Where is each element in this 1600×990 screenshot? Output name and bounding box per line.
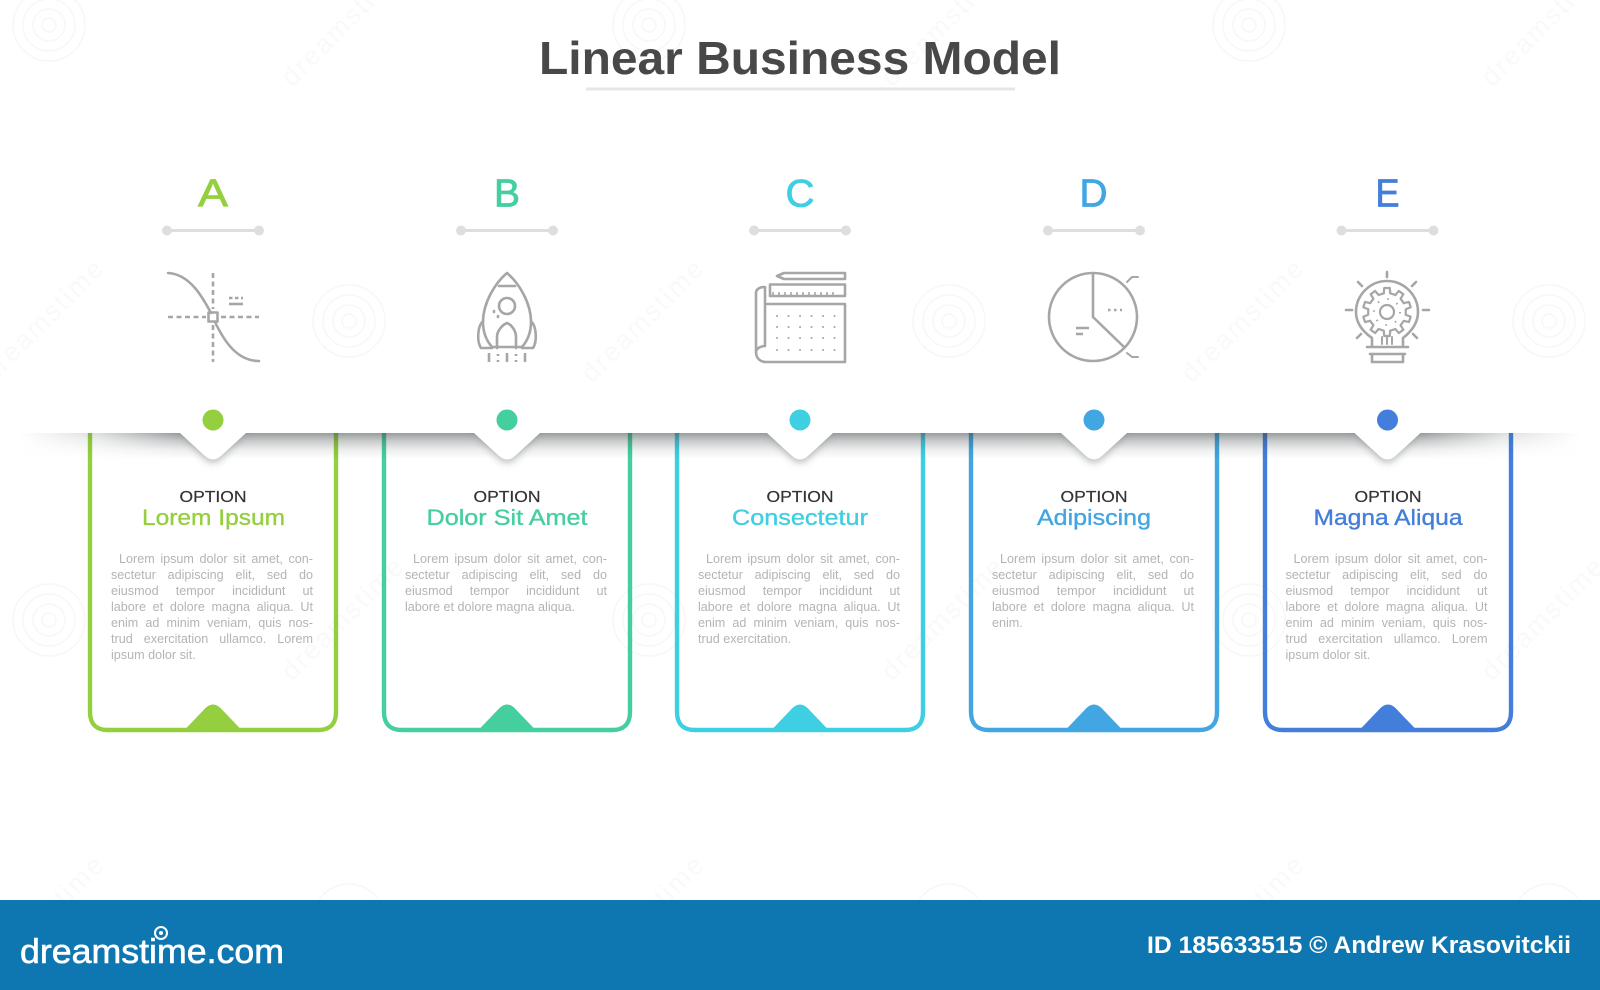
dot [790, 410, 810, 430]
dreamstime logo: dreamstime.com [20, 933, 284, 971]
option label: OPTION [1060, 489, 1128, 506]
option title: Dolor Sit Amet [426, 505, 588, 530]
letter B: B [494, 172, 520, 216]
body text: eiusmod tempor incididunt ut [698, 584, 900, 598]
body text [698, 552, 900, 646]
pointer [767, 433, 833, 460]
pointer [1061, 433, 1127, 460]
body text: enim ad minim veniam, quis nos- [1286, 616, 1488, 630]
watermark pattern: dreamstime [1175, 254, 1309, 388]
bottom notch [184, 704, 242, 731]
body text: labore et dolore magna aliqua. [405, 600, 575, 614]
column A header [162, 172, 264, 460]
option title: Lorem Ipsum [142, 505, 285, 530]
body text: ipsum dolor sit. [1286, 648, 1370, 662]
footer banner [0, 900, 1600, 990]
body text: labore et dolore magna aliqua. Ut [111, 600, 313, 614]
body text: enim ad minim veniam, quis nos- [111, 616, 313, 630]
body text: sectetur adipiscing elit, sed do [405, 568, 607, 582]
card outline [677, 433, 923, 730]
icon: rocket [478, 273, 536, 362]
dot [1377, 410, 1398, 430]
body text: labore et dolore magna aliqua. Ut [698, 600, 900, 614]
letter E: E [1376, 172, 1400, 216]
title underline [586, 88, 1015, 90]
connector line [162, 226, 264, 236]
body text [992, 552, 1194, 630]
option title: Adipiscing [1037, 505, 1151, 530]
watermark pattern: dreamstime [275, 552, 409, 686]
body text: Lorem ipsum dolor sit amet, con- [1294, 552, 1488, 566]
body text: trud exercitation. [698, 632, 791, 646]
timeline band shadow [38, 433, 1561, 466]
card outline [384, 433, 630, 730]
body text: eiusmod tempor incididunt ut [1286, 584, 1488, 598]
body text [1286, 552, 1488, 662]
pointer [474, 433, 540, 460]
image credit: ID 185633515 © Andrew Krasovitckii [1147, 932, 1571, 959]
body text: sectetur adipiscing elit, sed do [698, 568, 900, 582]
body text: sectetur adipiscing elit, sed do [111, 568, 313, 582]
watermark pattern: dreamstime [575, 254, 709, 388]
letter D: D [1080, 172, 1108, 216]
title: Linear Business Model [539, 32, 1061, 84]
column D header [1043, 172, 1145, 460]
body text: eiusmod tempor incididunt ut [111, 584, 313, 598]
body text: Lorem ipsum dolor sit amet, con- [413, 552, 607, 566]
panel: Dolor Sit Amet [382, 433, 632, 732]
body text: Lorem ipsum dolor sit amet, con- [119, 552, 313, 566]
panel: Adipiscing [968, 433, 1220, 732]
column C header [749, 172, 851, 460]
dot [1084, 410, 1104, 430]
body text: enim ad minim veniam, quis nos- [698, 616, 900, 630]
body text [111, 552, 313, 662]
letter C: C [786, 172, 814, 216]
dot [202, 410, 224, 430]
body text: trud exercitation ullamco. Lorem [1286, 632, 1488, 646]
option label: OPTION [180, 489, 246, 506]
watermark pattern: dreamstime [1175, 850, 1309, 984]
card outline [971, 433, 1217, 730]
body text: enim. [992, 616, 1023, 630]
body text: ipsum dolor sit. [111, 648, 196, 662]
column E header [1336, 172, 1438, 460]
option label: OPTION [766, 489, 834, 506]
bottom notch [1064, 704, 1124, 731]
body text: sectetur adipiscing elit, sed do [1286, 568, 1488, 582]
body text: sectetur adipiscing elit, sed do [992, 568, 1194, 582]
option label: OPTION [474, 489, 540, 506]
body text: eiusmod tempor incididunt ut [405, 584, 607, 598]
card outline [90, 433, 336, 730]
icon: blueprint with calendar [756, 273, 845, 362]
body text: labore et dolore magna aliqua. Ut [1286, 600, 1488, 614]
icon: curve graph [168, 273, 259, 362]
connector line [456, 226, 558, 236]
body text: labore et dolore magna aliqua. Ut [992, 600, 1194, 614]
option title: Magna Aliqua [1313, 505, 1463, 530]
bottom notch [478, 704, 536, 731]
column B header [456, 172, 558, 460]
option label: OPTION [1354, 489, 1421, 506]
connector line [1336, 226, 1438, 236]
icon: pie chart [1049, 273, 1138, 361]
letter A: A [198, 172, 228, 216]
card outline [1264, 433, 1510, 730]
body text: Lorem ipsum dolor sit amet, con- [1000, 552, 1194, 566]
connector line [1043, 226, 1145, 236]
connector line [749, 226, 851, 236]
panel: Lorem Ipsum [88, 433, 338, 732]
body text: trud exercitation ullamco. Lorem [111, 632, 313, 646]
option title: Consectetur [732, 505, 868, 530]
bottom notch [770, 704, 830, 731]
icon: light bulb with gear [1346, 272, 1429, 362]
pointer [180, 433, 246, 460]
dot [496, 410, 518, 430]
body text [405, 552, 607, 614]
panel: Magna Aliqua [1262, 433, 1514, 732]
panel: Consectetur [674, 433, 926, 732]
pointer [1354, 433, 1420, 460]
body text: eiusmod tempor incididunt ut [992, 584, 1194, 598]
body text: Lorem ipsum dolor sit amet, con- [706, 552, 900, 566]
bottom notch [1358, 704, 1417, 731]
watermark pattern: dreamstime [575, 850, 709, 984]
watermark pattern: dreamstime [875, 552, 1009, 686]
